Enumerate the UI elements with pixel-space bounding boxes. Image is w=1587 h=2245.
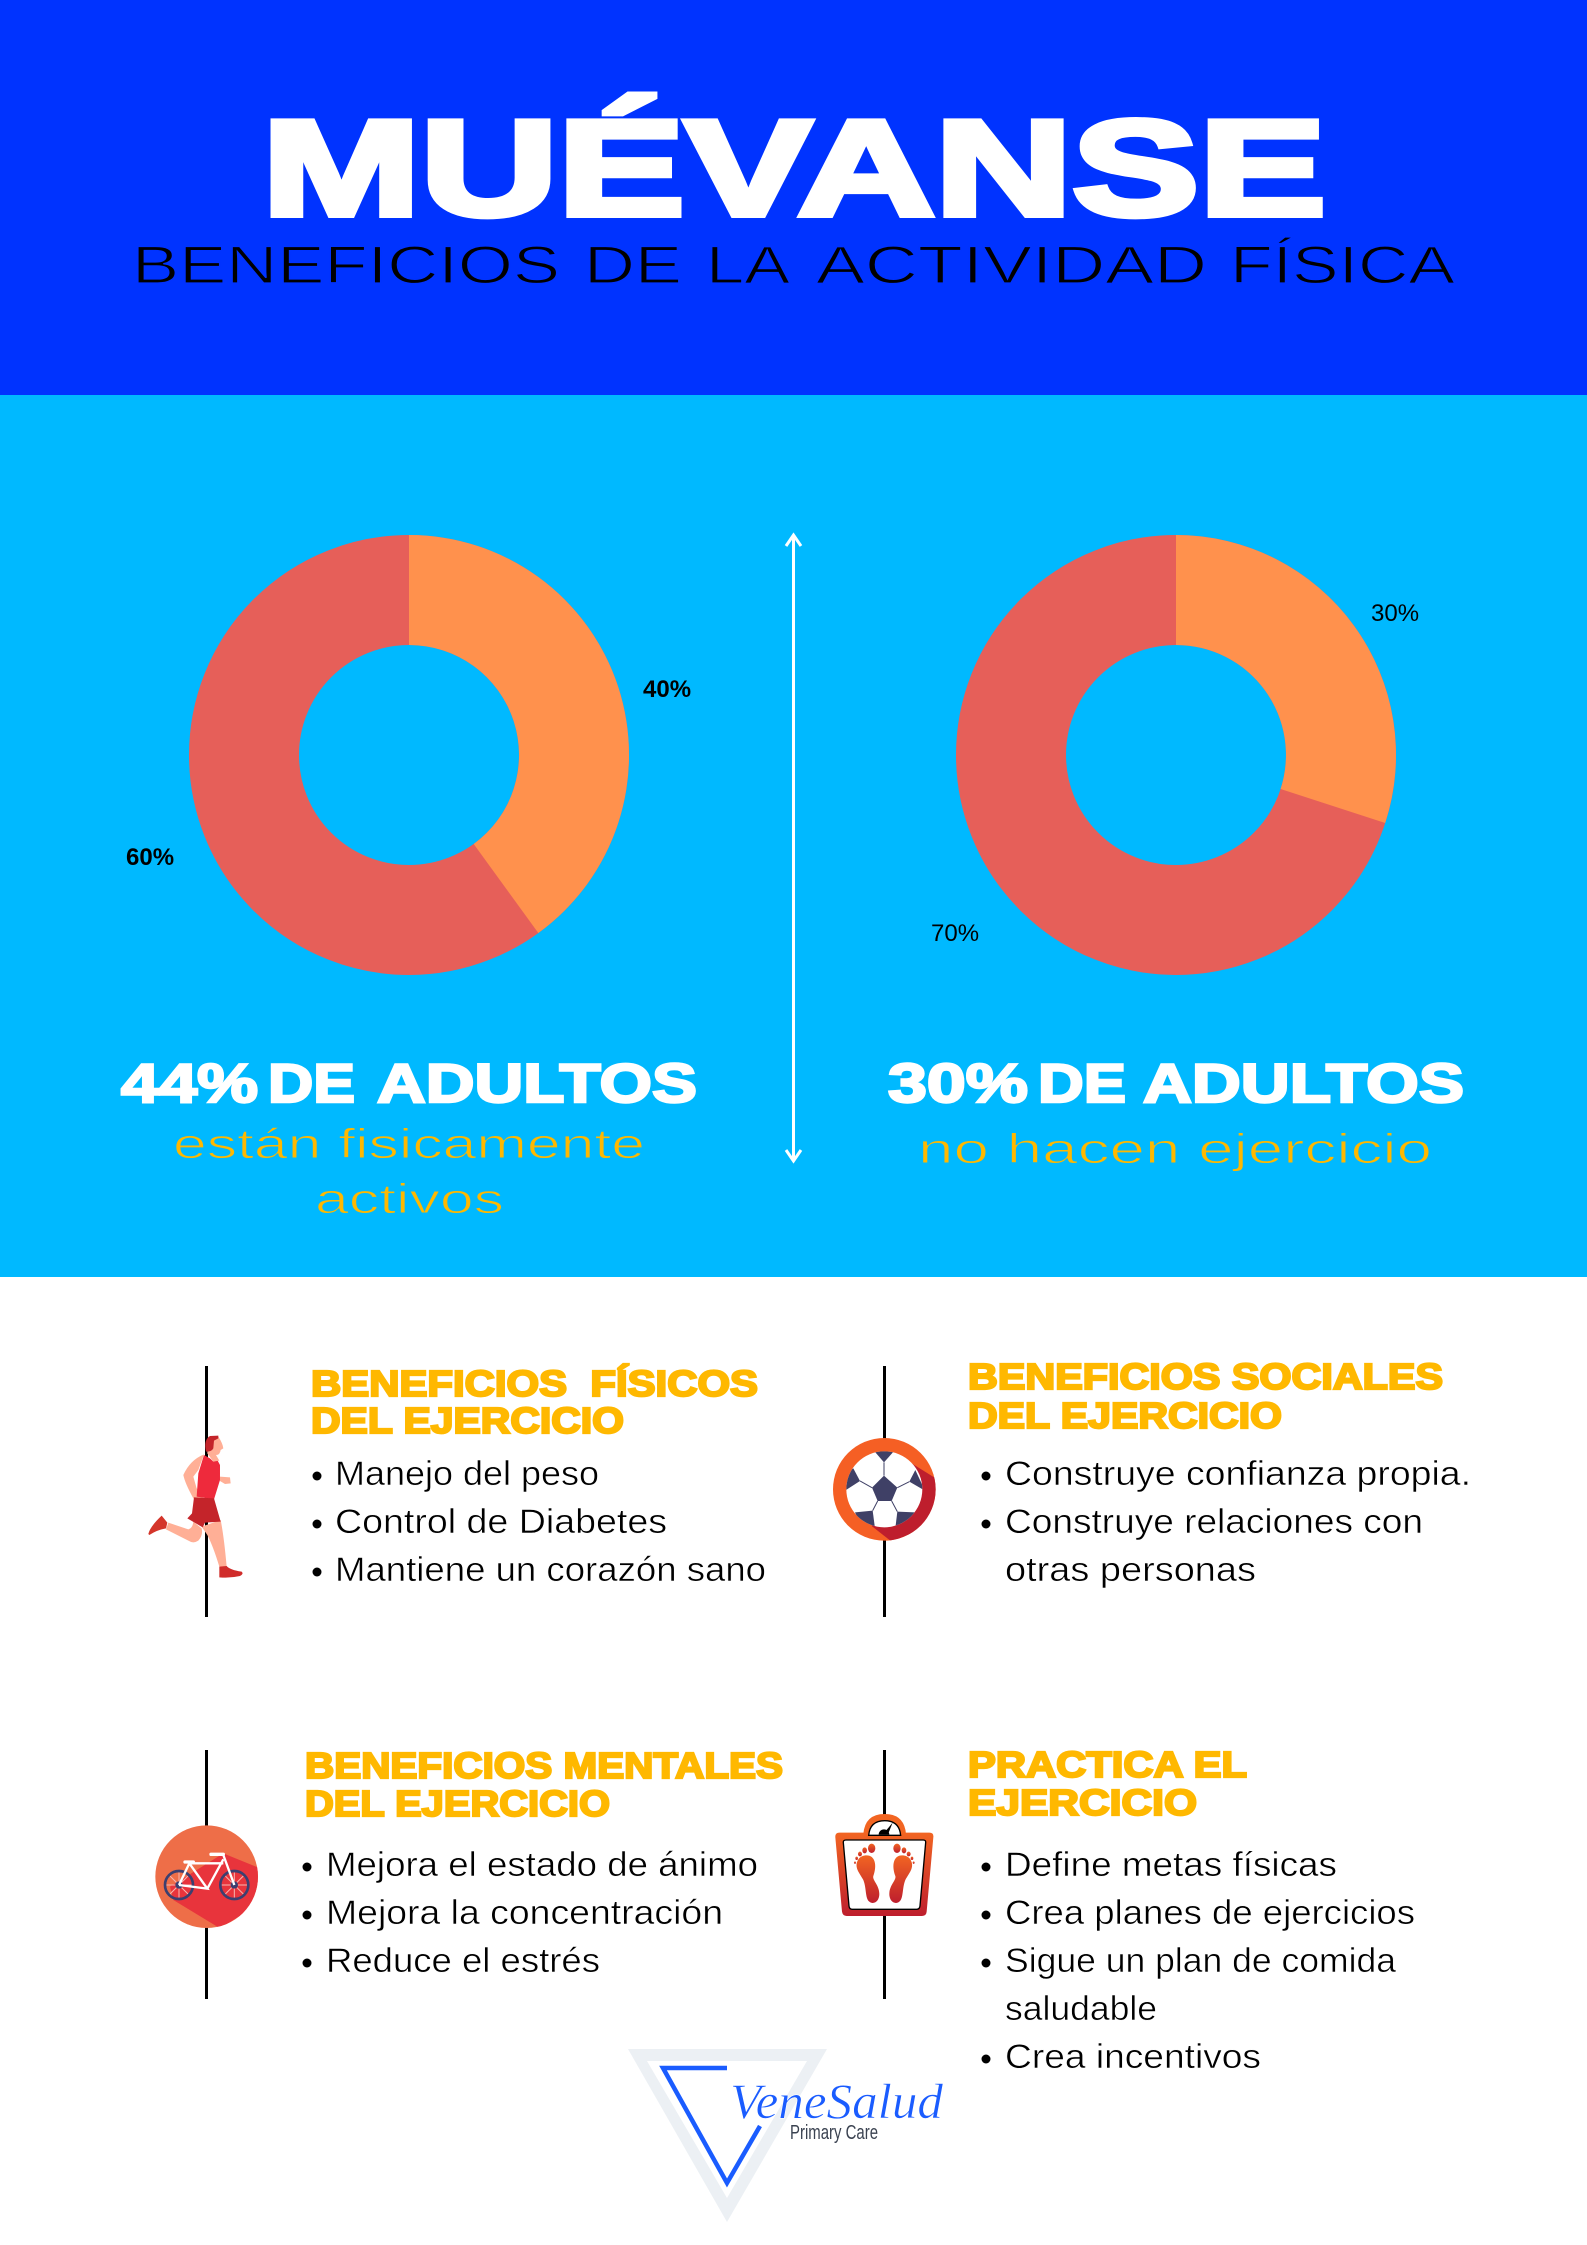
stat text: 30% adults: DE bbox=[1038, 1052, 1126, 1114]
stat text: 44% adults: están fisicamente bbox=[173, 1120, 645, 1167]
heading: physical benefits: DEL EJERCICIO bbox=[311, 1400, 624, 1441]
donut chart: inactive adults: 70% bbox=[931, 920, 979, 947]
stat text: 30% adults: ADULTOS bbox=[1143, 1052, 1464, 1114]
list: social benefits: Construye confianza propia. bbox=[1005, 1455, 1471, 1493]
list: physical benefits: Manejo del peso bbox=[335, 1455, 599, 1493]
subtitle: DE bbox=[584, 236, 682, 295]
title: MUÉVANSE bbox=[262, 92, 1326, 244]
panel: mental benefits bbox=[155, 1745, 783, 1999]
icon: bathroom scale bbox=[835, 1814, 933, 1916]
list: mental benefits: Reduce el estrés bbox=[326, 1942, 600, 1980]
heading: social benefits: DEL EJERCICIO bbox=[968, 1395, 1282, 1436]
list: practice exercise: Crea incentivos bbox=[1005, 2038, 1261, 2076]
list: physical benefits bbox=[312, 1455, 766, 1589]
donut chart: inactive adults bbox=[931, 535, 1419, 947]
panel: header bbox=[0, 0, 1587, 395]
heading: mental benefits bbox=[305, 1745, 783, 1824]
heading: practice exercise bbox=[968, 1744, 1247, 1823]
stat text: 30% adults bbox=[888, 1052, 1464, 1172]
stat text: 30% adults: 30% bbox=[888, 1052, 1028, 1114]
panel: practice exercise bbox=[835, 1744, 1415, 2076]
list: mental benefits: Mejora la concentración bbox=[326, 1894, 723, 1932]
heading: social benefits: BENEFICIOS SOCIALES bbox=[968, 1356, 1443, 1397]
panel: social benefits bbox=[833, 1356, 1471, 1617]
stat text: 30% adults: no hacen ejercicio bbox=[918, 1125, 1432, 1172]
subtitle bbox=[132, 236, 1456, 295]
icon: bicycle bbox=[155, 1825, 260, 1928]
heading: physical benefits bbox=[311, 1363, 758, 1441]
heading: physical benefits: BENEFICIOS FÍSICOS bbox=[311, 1363, 758, 1404]
list: physical benefits: Control de Diabetes bbox=[335, 1503, 667, 1541]
logo: VeneSalud Primary Care bbox=[628, 2049, 944, 2222]
logo: VeneSalud Primary Care: VeneSalud bbox=[730, 2073, 944, 2129]
panel: statistics bbox=[0, 395, 1587, 1277]
stat text: 44% adults: DE bbox=[268, 1052, 355, 1114]
donut chart: active adults: 40% bbox=[643, 676, 691, 703]
subtitle: FÍSICA bbox=[1230, 236, 1456, 295]
arrow: divider bbox=[786, 535, 801, 1161]
heading: practice exercise: PRACTICA EL bbox=[968, 1744, 1247, 1785]
donut chart: inactive adults: 30% bbox=[1371, 600, 1419, 627]
stat text: 44% adults bbox=[121, 1052, 697, 1222]
stat text: 44% adults: 44% bbox=[121, 1052, 258, 1114]
list: practice exercise: Sigue un plan de comida bbox=[1005, 1942, 1397, 1980]
donut chart: active adults bbox=[126, 535, 691, 933]
subtitle: LA bbox=[706, 236, 791, 295]
subtitle: ACTIVIDAD bbox=[816, 236, 1207, 295]
stat text: 44% adults: activos bbox=[315, 1175, 504, 1222]
heading: mental benefits: DEL EJERCICIO bbox=[305, 1783, 610, 1824]
subtitle: BENEFICIOS bbox=[132, 236, 560, 295]
list: practice exercise: Crea planes de ejercicios bbox=[1005, 1894, 1415, 1932]
list: practice exercise: saludable bbox=[1005, 1990, 1157, 2028]
list: physical benefits: Mantiene un corazón sano bbox=[335, 1551, 766, 1589]
logo: VeneSalud Primary Care: Primary Care bbox=[790, 2122, 878, 2144]
list: social benefits: otras personas bbox=[1005, 1551, 1256, 1589]
list: social benefits: Construye relaciones con bbox=[1005, 1503, 1423, 1541]
list: mental benefits: Mejora el estado de ánimo bbox=[326, 1846, 758, 1884]
heading: social benefits bbox=[968, 1356, 1443, 1436]
list: mental benefits bbox=[302, 1846, 758, 1980]
list: social benefits bbox=[982, 1455, 1471, 1589]
list: practice exercise: Define metas físicas bbox=[1005, 1846, 1337, 1884]
heading: practice exercise: EJERCICIO bbox=[968, 1782, 1197, 1823]
list: practice exercise bbox=[982, 1846, 1415, 2076]
donut chart: active adults: 60% bbox=[126, 844, 174, 871]
heading: mental benefits: BENEFICIOS MENTALES bbox=[305, 1745, 783, 1786]
panel: physical benefits bbox=[148, 1363, 766, 1617]
icon: soccer ball bbox=[833, 1438, 943, 1542]
icon: runner bbox=[148, 1436, 243, 1578]
stat text: 44% adults: ADULTOS bbox=[377, 1052, 697, 1114]
